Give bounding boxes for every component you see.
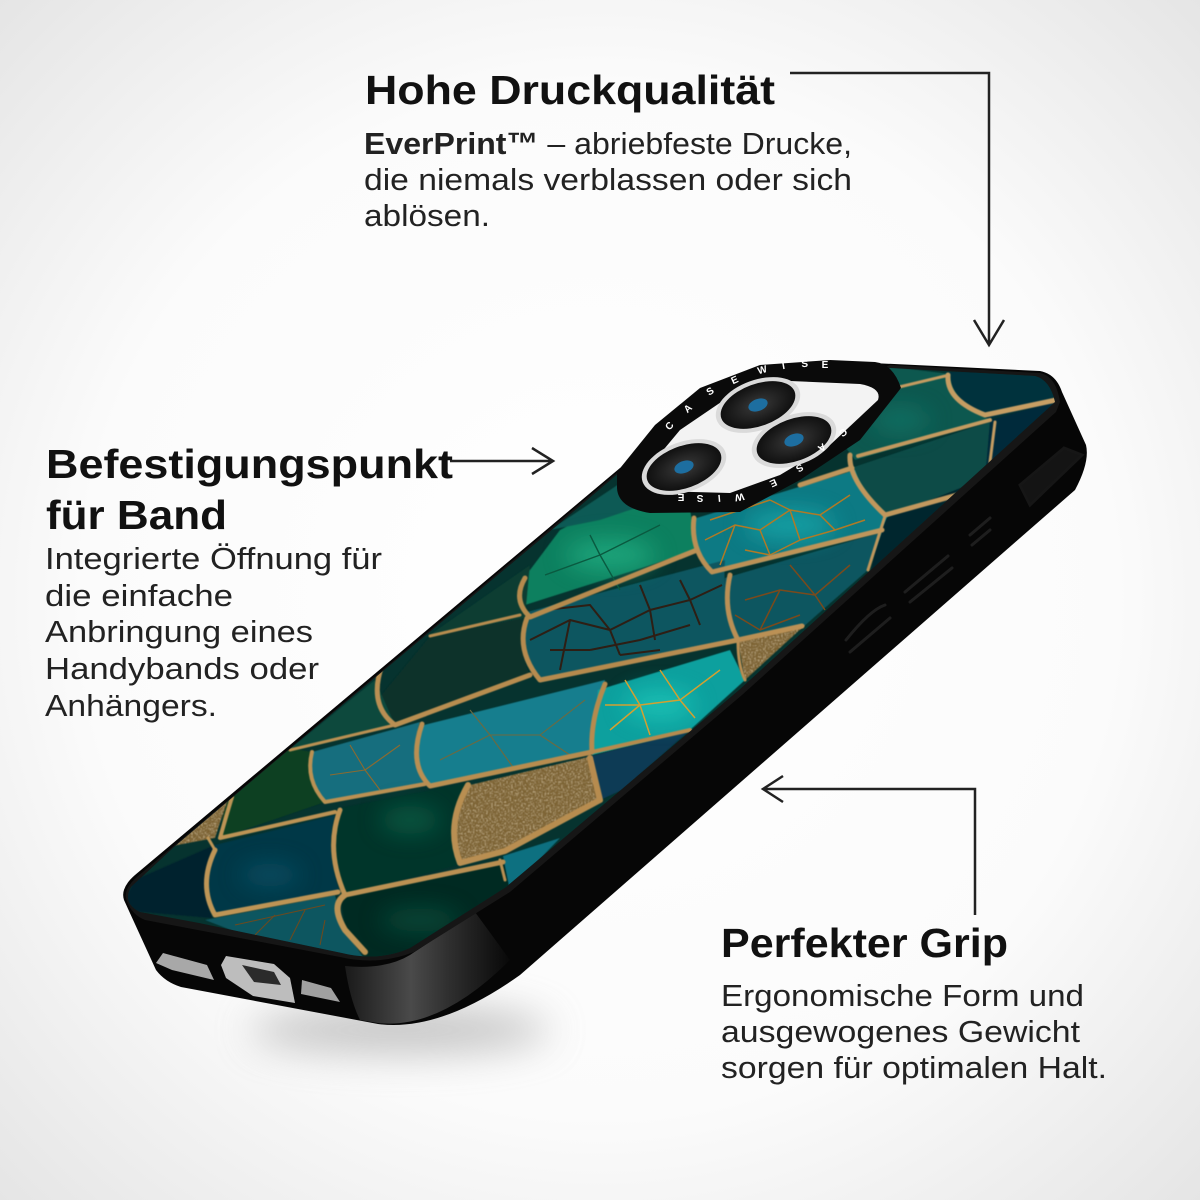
text block: strap attachment <box>45 441 453 723</box>
scale: lower cell teal <box>725 532 882 642</box>
body: grip <box>721 978 1107 1085</box>
brand text lower: E <box>767 476 778 489</box>
scale: right mid teal <box>847 422 990 512</box>
cracks in scales <box>235 495 865 945</box>
scale: dark wedge <box>434 567 530 633</box>
scale: blue lower <box>592 730 690 800</box>
body: strap attachment <box>45 541 382 723</box>
lens left <box>634 428 734 506</box>
gold borders <box>206 375 1056 952</box>
scale: small gold <box>738 625 805 680</box>
case body <box>123 361 1087 1025</box>
scale: bottom deep green <box>342 864 509 956</box>
body: print quality: ablösen. <box>364 198 490 233</box>
body: grip: Ergonomische Form und <box>721 978 1084 1013</box>
scale: right edge dark <box>985 400 1060 478</box>
brand text lower: W <box>733 490 745 503</box>
scale: dark green upper left <box>285 680 395 753</box>
side buttons <box>846 448 1082 652</box>
printed back panel <box>128 368 1055 956</box>
scale: lower right edge dark <box>870 478 985 580</box>
glowing colour variation <box>240 408 930 932</box>
usb opening <box>242 965 281 985</box>
heading: strap attachment <box>46 441 453 538</box>
scale: turquoise large <box>417 680 605 786</box>
scale: bottom teal cells <box>205 895 365 960</box>
brand text upper: W <box>756 364 769 377</box>
body: strap attachment: Handybands oder <box>45 651 319 686</box>
brand text upper: E <box>730 374 741 387</box>
body: strap attachment: Anbringung eines <box>45 614 313 649</box>
scale: tiny gold corner <box>175 802 228 846</box>
camera ring <box>617 360 901 513</box>
scale: small teal <box>503 838 560 890</box>
scale: left corner navy <box>128 847 212 918</box>
scale: bright green <box>526 508 694 605</box>
case inner rim <box>126 365 1060 961</box>
brand text upper: S <box>705 385 717 398</box>
brand text upper: C <box>664 420 677 433</box>
scale: gold glitter <box>454 756 600 864</box>
charging and speaker ports <box>156 953 340 1003</box>
usb port <box>221 956 295 1003</box>
camera module <box>617 359 901 513</box>
body: print quality: EverPrint™ – abriebfeste Drucke, <box>364 126 852 161</box>
scale: dark green <box>382 618 524 719</box>
brand text upper: E <box>822 360 829 371</box>
text block: grip <box>721 920 1107 1085</box>
phone shadow <box>250 1006 550 1054</box>
body: print quality: die niemals verblassen oder sich <box>364 162 852 197</box>
body: print quality <box>364 126 852 233</box>
brand text lower: S <box>793 461 805 474</box>
arrow: grip <box>763 776 975 915</box>
body: strap attachment: Integrierte Öffnung für <box>45 541 382 576</box>
arrow: strap attachment <box>450 448 553 474</box>
brand text upper: S <box>801 359 809 370</box>
body: grip: ausgewogenes Gewicht <box>721 1014 1080 1049</box>
heading: strap attachment: für Band <box>46 492 227 538</box>
brand text lower: A <box>815 440 828 454</box>
heading: print quality: Hohe Druckqualität <box>365 67 775 113</box>
brand text upper <box>664 359 829 433</box>
heading: strap attachment: Befestigungspunkt <box>46 441 453 487</box>
lens top <box>708 366 808 444</box>
brand text lower: E <box>677 491 684 502</box>
scale: cell teal <box>690 470 888 574</box>
scale: teal mid left <box>310 722 425 802</box>
body: strap attachment: die einfache <box>45 578 233 613</box>
scale: deep green <box>334 782 470 895</box>
scale: upper teal <box>840 366 990 460</box>
camera glass <box>644 381 879 493</box>
brand text upper: I <box>781 361 786 372</box>
scale: navy <box>206 815 340 915</box>
brand text lower: I <box>717 492 721 503</box>
right speaker <box>301 980 340 1002</box>
arrow: print quality <box>790 73 1004 345</box>
lens right <box>744 401 844 479</box>
scale: turquoise cells <box>592 650 745 755</box>
brand text lower <box>677 425 849 503</box>
left speaker <box>156 953 214 980</box>
body: strap attachment: Anhängers. <box>45 688 217 723</box>
body: grip: sorgen für optimalen Halt. <box>721 1050 1107 1085</box>
phone case <box>100 350 1100 1025</box>
brand text lower: C <box>836 425 849 438</box>
brand text upper: A <box>682 403 695 416</box>
scale: top right dark <box>945 372 1060 420</box>
case corner highlight <box>345 912 510 1024</box>
scale: green wedge behind lens <box>550 470 660 530</box>
heading: grip: Perfekter Grip <box>721 920 1008 966</box>
text block: print quality <box>364 67 852 233</box>
scale: blue cells <box>524 560 738 682</box>
scale: forest green <box>220 748 325 838</box>
brand text lower: S <box>696 492 703 503</box>
